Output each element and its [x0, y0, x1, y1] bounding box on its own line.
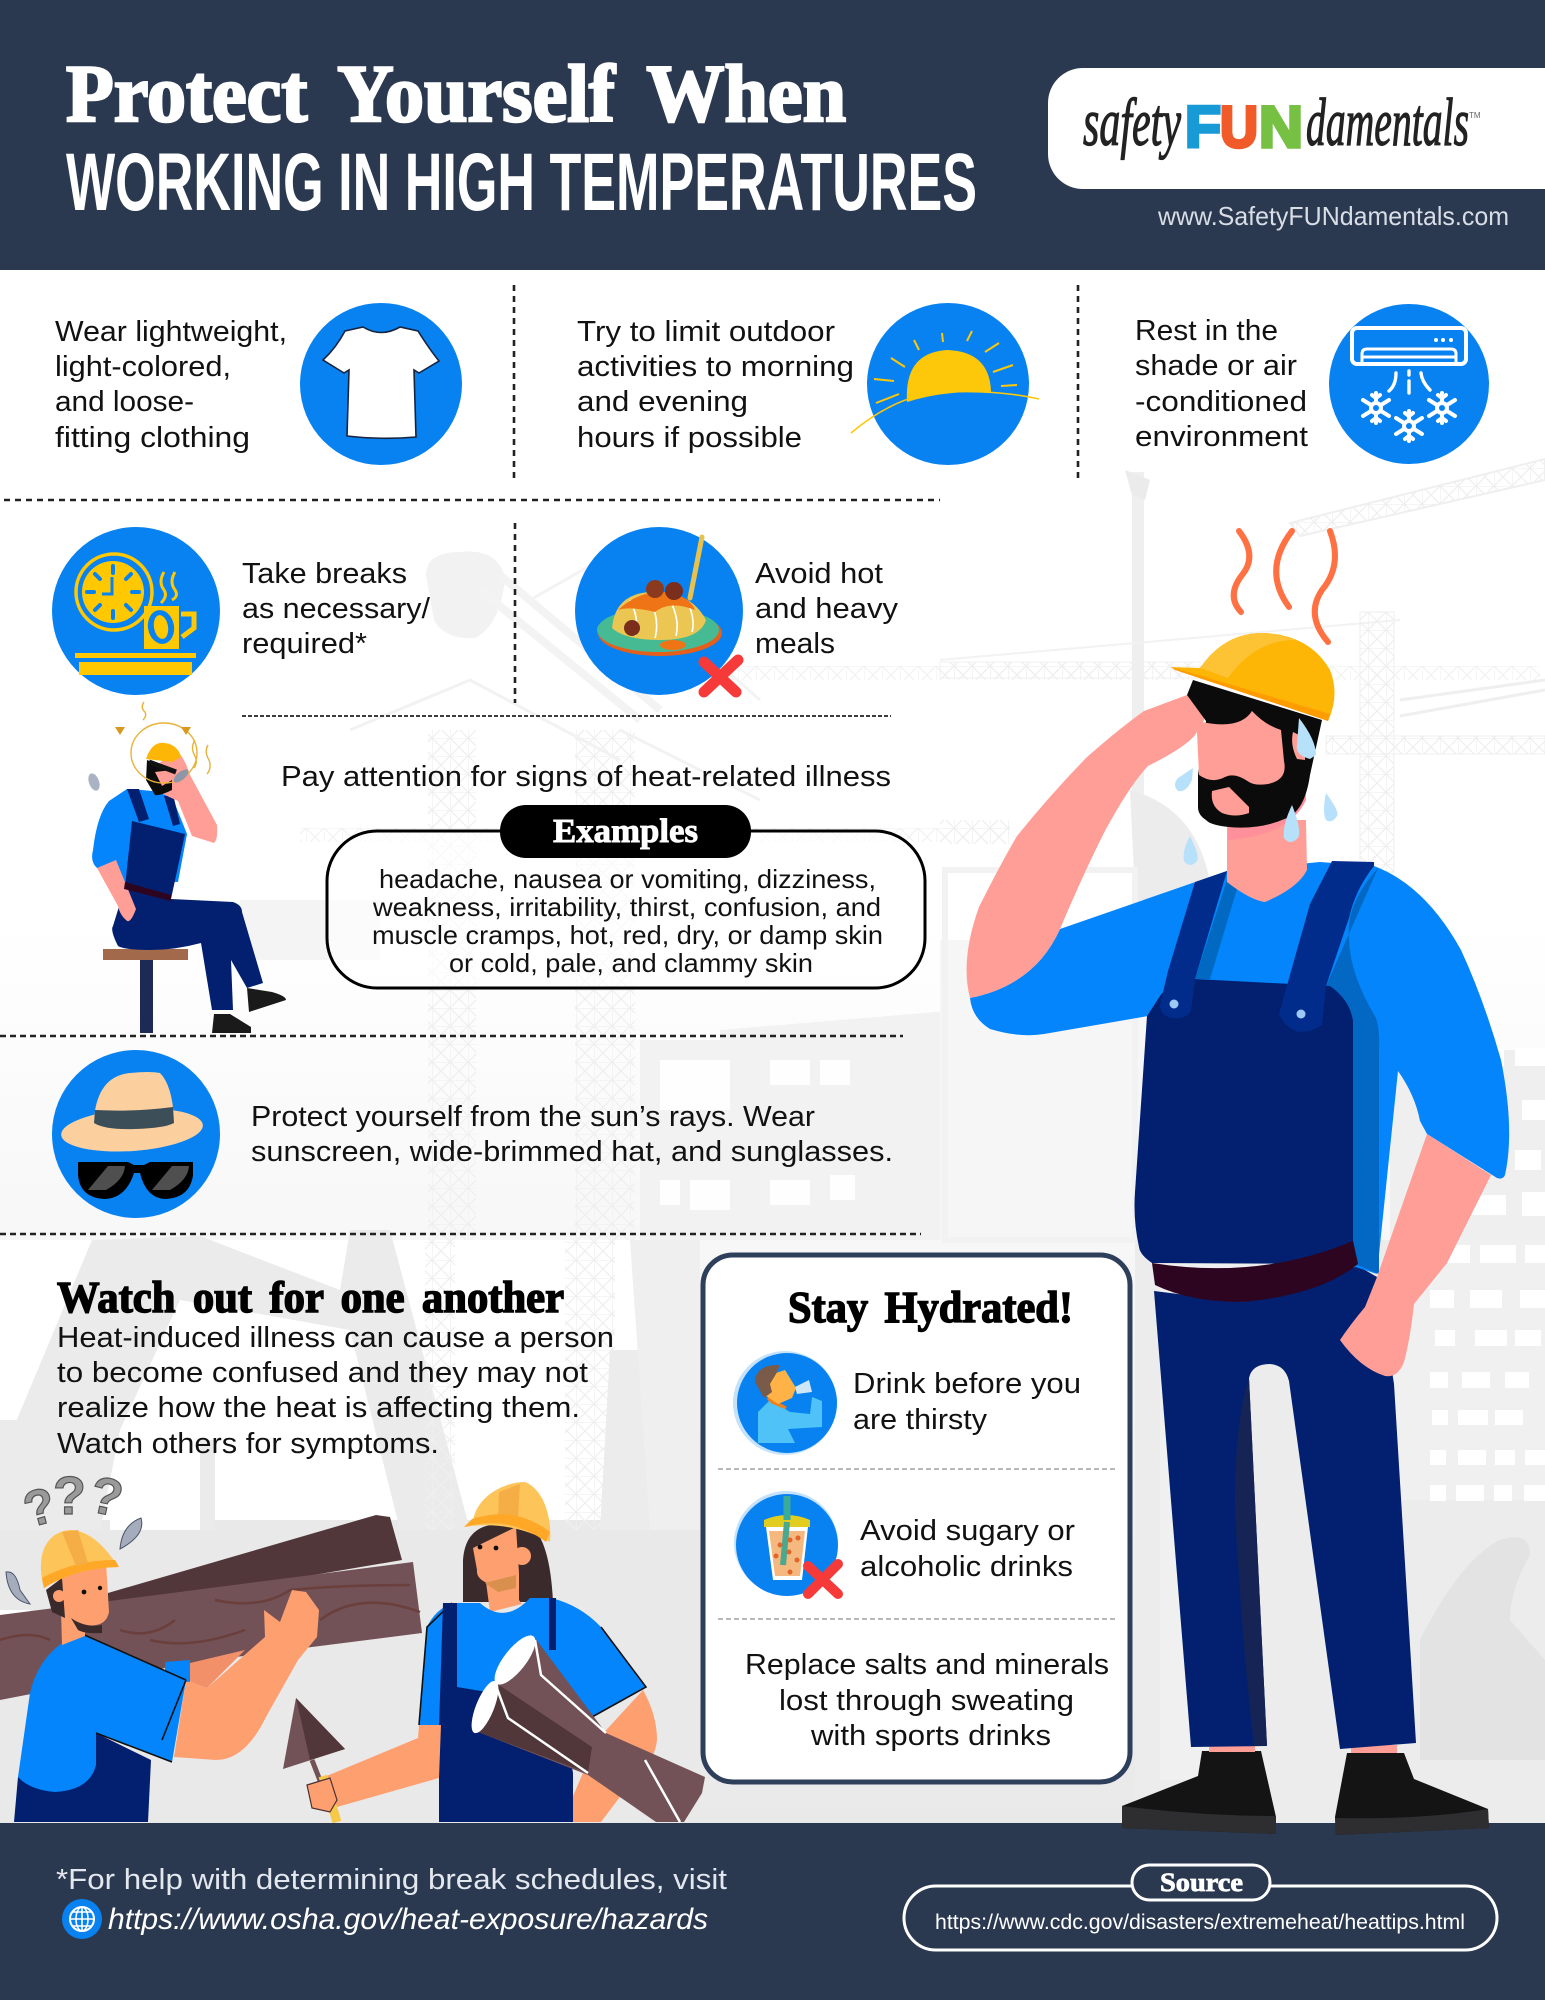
illustration: seated dizzy worker [86, 702, 286, 1033]
hard hat [1171, 633, 1335, 721]
footnote text: *For help with determining break schedules, visit [56, 1864, 727, 1896]
logo pill: safety [1083, 84, 1181, 160]
illustration: worker with trowel and logs [283, 1482, 705, 1822]
list of symptoms: weakness, irritability, thirst, confusion, and [372, 892, 881, 922]
question marks: ? [85, 1466, 128, 1529]
text: drink before thirsty [853, 1368, 1081, 1436]
tip text: clothing: Wear lightweight, [55, 316, 287, 348]
paragraph [57, 1322, 614, 1460]
trousers [1154, 1266, 1416, 1749]
straps [1160, 861, 1374, 1032]
panel: stay hydrated [703, 1255, 1130, 1782]
tip text: outdoor hours: activities to morning [577, 351, 854, 383]
source box: Source [1160, 1868, 1243, 1897]
tip text: meals: Avoid hot [755, 558, 883, 590]
paragraph: to become confused and they may not [57, 1357, 588, 1389]
paragraph: realize how the heat is affecting them. [57, 1392, 580, 1424]
sweat drops [1175, 718, 1338, 865]
icon: air conditioner [1329, 304, 1489, 464]
tip text: outdoor hours [577, 316, 854, 454]
source box: https://www.cdc.gov/disasters/extremeheat/heattips.html [935, 1911, 1465, 1934]
tip text: take breaks: as necessary/ [242, 593, 431, 625]
icon: t-shirt [300, 303, 462, 465]
logo pill: TM [1469, 111, 1481, 120]
text: replace salts [745, 1649, 1109, 1752]
icon: sunrise [851, 303, 1039, 465]
head [1187, 680, 1322, 828]
tip: limit outdoor hours [577, 303, 1039, 465]
text: avoid sugary drinks: alcoholic drinks [860, 1551, 1073, 1583]
tip text: sun: sunscreen, wide-brimmed hat, and sunglasses. [251, 1136, 893, 1168]
tip text: take breaks: required* [242, 628, 367, 660]
tip text: rest: environment [1135, 421, 1308, 453]
dividers [0, 285, 1078, 1234]
website url: www.SafetyFUNdamentals.com [1157, 201, 1509, 231]
source box [904, 1865, 1497, 1950]
tip text: take breaks: Take breaks [242, 558, 407, 590]
list of symptoms: or cold, pale, and clammy skin [449, 948, 813, 978]
osha link: https://www.osha.gov/heat-exposure/hazards [108, 1903, 708, 1936]
heat waves [1234, 531, 1335, 642]
tip text: clothing: fitting clothing [55, 422, 250, 454]
panel outline [703, 1255, 1130, 1782]
panel: examples [327, 805, 925, 988]
tip: avoid heavy meals [575, 527, 899, 695]
stool [103, 949, 188, 1033]
examples pill: Examples [553, 813, 698, 850]
tip text: sun [251, 1101, 893, 1168]
icon: pasta plate with red cross [575, 527, 743, 695]
tip text: clothing [55, 316, 287, 454]
illustration: worker carrying beam [0, 1466, 422, 1822]
heading: Watch out for one another [57, 1273, 564, 1322]
examples pill [500, 805, 751, 858]
text: replace salts: Replace salts and minerals [745, 1649, 1109, 1681]
raised arm [967, 694, 1208, 998]
text: avoid sugary drinks [860, 1515, 1075, 1583]
shaded shirt strip [1326, 868, 1379, 1274]
tip text: rest: -conditioned [1135, 386, 1307, 418]
tip: sun protection [52, 1050, 893, 1218]
text: replace salts: lost through sweating [779, 1685, 1074, 1717]
text: replace salts: with sports drinks [810, 1720, 1051, 1752]
section: watch out for one another [57, 1273, 614, 1460]
tip text: rest: Rest in the [1135, 315, 1278, 347]
tip text: clothing: and loose- [55, 386, 194, 418]
heading: pay attention: Pay attention for signs of heat-related illness [281, 761, 891, 793]
title line 2: WORKING IN HIGH TEMPERATURES [66, 137, 977, 228]
icon: sugary drink with red cross [734, 1491, 838, 1596]
list of symptoms [372, 864, 883, 978]
tip: take breaks [52, 527, 431, 695]
footer band [0, 1823, 1545, 2000]
tip: rest in shade [1135, 304, 1489, 464]
icon: clock and coffee mug [52, 527, 220, 695]
list of symptoms: headache, nausea or vomiting, dizziness, [379, 864, 876, 894]
list of symptoms: muscle cramps, hot, red, dry, or damp skin [372, 920, 883, 950]
text: avoid sugary drinks: Avoid sugary or [860, 1515, 1075, 1547]
background: construction site silhouette [0, 270, 1545, 1823]
paragraph: Watch others for symptoms. [57, 1428, 439, 1460]
question marks: ? [18, 1476, 62, 1538]
icon: globe [62, 1899, 102, 1939]
header band [0, 0, 1545, 270]
bib [1134, 979, 1358, 1264]
title line 1: Protect Yourself When [66, 48, 846, 139]
illustration: large sweating worker [967, 531, 1509, 1835]
shoes [1122, 1745, 1489, 1835]
tip text: meals: and heavy [755, 593, 899, 625]
shirt [970, 862, 1509, 1274]
icon: hat and sunglasses [52, 1050, 220, 1218]
logo pill: F [1185, 95, 1221, 160]
tip text: meals [755, 558, 899, 660]
tip text: outdoor hours: hours if possible [577, 422, 802, 454]
panel title: Stay Hydrated! [788, 1283, 1073, 1332]
tip text: rest [1135, 315, 1308, 453]
tip text: outdoor hours: and evening [577, 386, 748, 418]
logo pill [1048, 68, 1545, 189]
tip text: clothing: light-colored, [55, 351, 231, 383]
tip: clothing [55, 303, 462, 465]
logo pill: N [1259, 95, 1303, 160]
tip text: take breaks [242, 558, 431, 660]
paragraph: Heat-induced illness can cause a person [57, 1322, 614, 1354]
logo pill: U [1220, 95, 1258, 160]
tip text: outdoor hours: Try to limit outdoor [577, 316, 835, 348]
neck and hand [1227, 820, 1307, 902]
icon: person drinking [733, 1351, 837, 1455]
tip text: rest: shade or air [1135, 350, 1297, 382]
rounded outline [327, 831, 925, 988]
tip text: sun: Protect yourself from the sun’s rays. Wear [251, 1101, 815, 1133]
tip text: meals: meals [755, 628, 835, 660]
text: drink before thirsty: are thirsty [853, 1404, 988, 1436]
belt [1152, 1241, 1358, 1302]
text: drink before thirsty: Drink before you [853, 1368, 1081, 1400]
question marks: ? [53, 1466, 86, 1526]
question marks [18, 1466, 128, 1538]
